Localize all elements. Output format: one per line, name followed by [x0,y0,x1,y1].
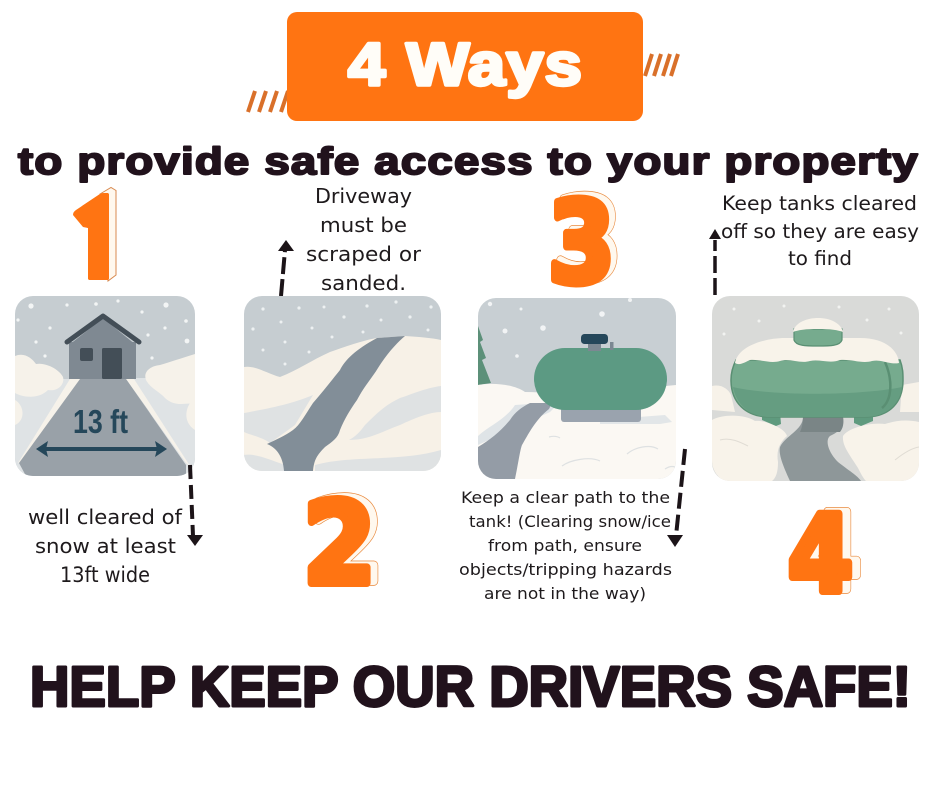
number 1: 1 [52,165,139,310]
panel 2: scraped driveway illustration [244,296,441,471]
text: keep a clear path to the tank: are not in the way) [484,584,646,603]
text: driveway must be scraped [306,184,422,295]
tank feet [762,417,781,426]
grey snow shadows [349,386,441,440]
text: well cleared of snow [28,505,183,587]
text: keep a clear path to the tank: tank! (Clearing snow/ice [469,512,671,531]
panel 1: cleared driveway illustration [15,296,195,476]
number 3: 3 [548,179,615,309]
house [69,342,136,379]
path [780,417,861,481]
snowflakes [722,304,902,336]
tank body [534,348,667,410]
number 4: 4 [788,493,853,616]
number 3: 3 [554,176,621,306]
pine tree [478,326,491,385]
number 4: 4 [796,491,861,614]
snow drifts [712,385,735,412]
text: keep tanks cleared off: Keep tanks cleared [722,192,917,215]
snowflakes [251,300,433,366]
width arrow [36,441,167,457]
arrow 3 [667,449,685,547]
number 4: 4 [796,491,861,614]
tank cap [581,334,608,344]
text: keep tanks cleared off: off so they are easy [721,220,919,243]
decorative slashes right of banner [645,54,678,76]
path [478,403,552,479]
number 2: 2 [310,476,383,608]
13 ft label: 13 ft [73,403,128,440]
snowflakes [16,299,189,360]
road [19,379,186,476]
text: driveway must be scraped: Driveway [315,184,412,208]
text: keep a clear path to the tank: from path, ensure [488,536,642,555]
foreground snow [712,416,787,481]
text: well cleared of snow: well cleared of [28,505,183,529]
panel 4: snow-covered tank illustration [712,296,919,481]
text: keep a clear path to the tank: Keep a clear path to the [461,488,670,507]
text: well cleared of snow: 13ft wide [60,563,150,587]
tank neck [588,344,601,351]
banner: 4 Ways [287,12,643,121]
snow field [478,384,676,479]
closing headline: HELP KEEP OUR DRIVERS SAFE! [30,655,911,719]
text: keep tanks cleared off: to find [788,247,852,270]
text: keep a clear path to the tank: objects/tripping hazards [459,560,672,579]
banner: 4 Ways: 4 Ways [348,31,583,98]
text: driveway must be scraped: scraped or [306,242,422,266]
number 2: 2 [303,478,376,610]
text: keep tanks cleared off [721,192,919,270]
tank body [731,360,903,417]
snow banks [15,379,70,474]
number 2: 2 [310,476,383,608]
number 3: 3 [554,176,621,306]
tank base [561,410,641,422]
road [267,336,405,471]
panel 3: clear path to tank illustration [478,298,676,479]
tank snow cap [735,338,899,364]
text: well cleared of snow: snow at least [35,534,176,558]
decorative slashes left of banner [248,91,288,112]
text: driveway must be scraped: sanded. [321,271,406,295]
snow hill [244,336,441,471]
arrow 2 [278,240,294,296]
text: driveway must be scraped: must be [320,213,407,237]
text: keep a clear path to the tank [459,488,672,603]
subtitle: to provide safe access to your property [18,141,919,183]
arrow 4 [709,229,721,295]
tank dome [794,329,842,346]
number 1 [73,186,116,282]
snowflakes [488,298,632,358]
dome snow [793,318,843,332]
arrow 1 [187,465,203,546]
